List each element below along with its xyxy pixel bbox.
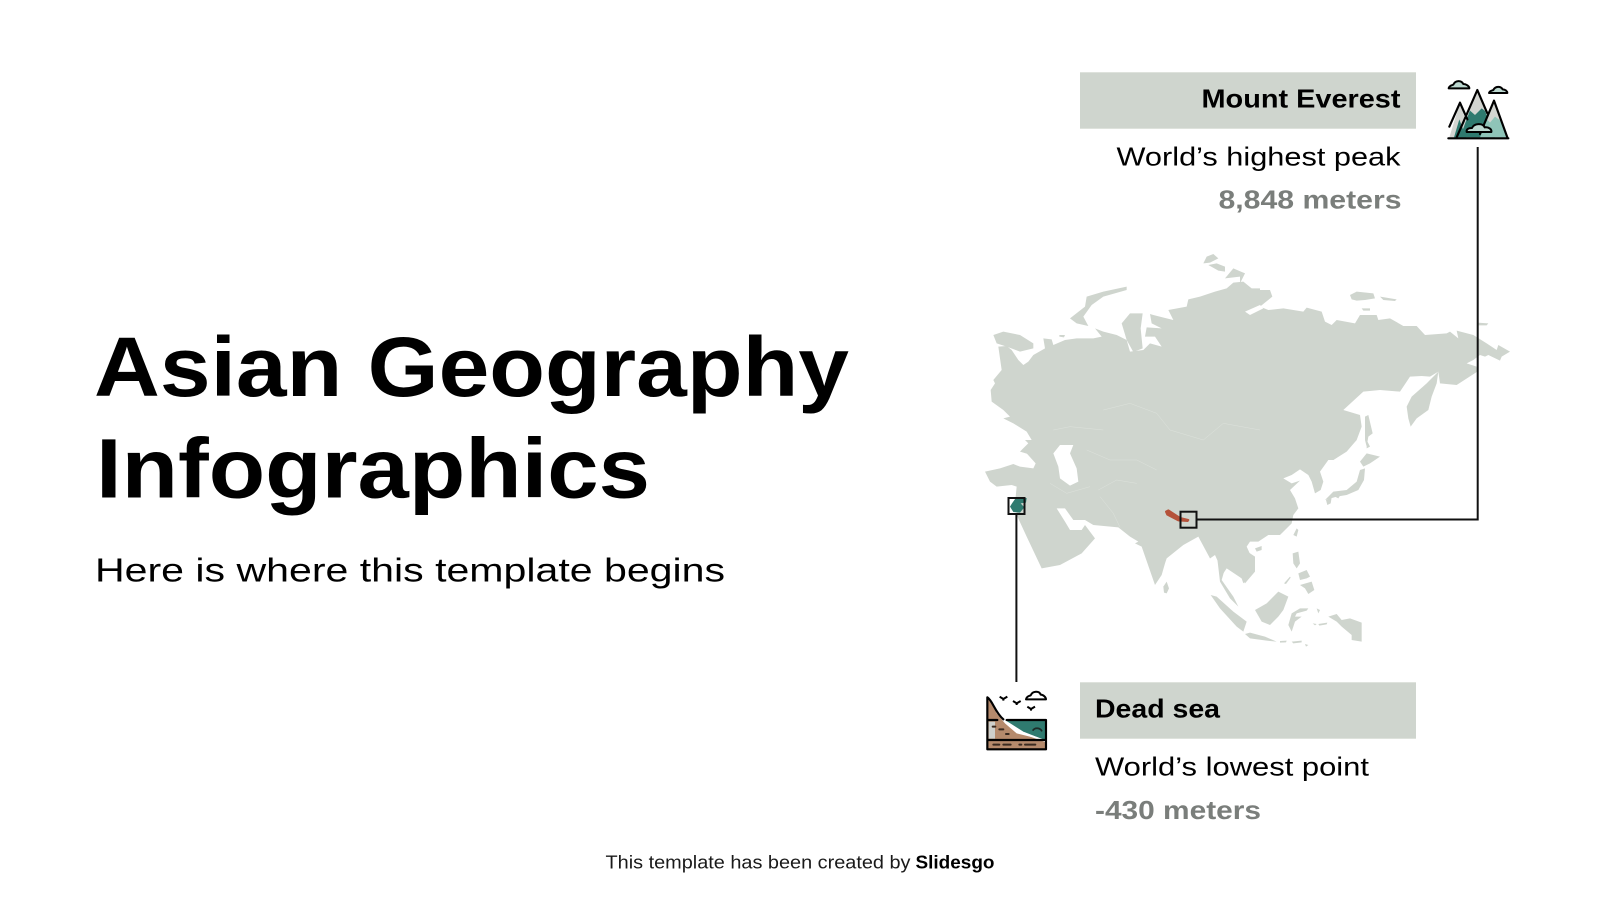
value: -430 meters [1095, 795, 1261, 825]
footer credit: This template has been created by [606, 851, 911, 872]
land: south-west Asia and India [985, 440, 1260, 593]
panel: Dead sea [1080, 682, 1416, 825]
title: Infographics [96, 422, 650, 516]
description: World’s lowest point [1095, 751, 1370, 781]
land: north-east Asia [1240, 272, 1510, 460]
description: World’s highest peak [1116, 141, 1402, 171]
icon: mountains [1448, 81, 1508, 138]
icon: dead sea cliff [987, 692, 1046, 749]
connector: Dead Sea [1008, 498, 1024, 682]
highlight: Nepal [1166, 510, 1188, 521]
footer credit: Slidesgo [916, 851, 994, 872]
land: north-west Asia [991, 254, 1260, 460]
value: 8,848 meters [1218, 184, 1402, 214]
land: south-east Asia [1200, 440, 1380, 647]
highlight: Dead Sea area [1010, 498, 1027, 513]
subtitle: Here is where this template begins [95, 552, 725, 588]
panel: Mount Everest [1080, 72, 1416, 214]
label bar [1080, 72, 1416, 129]
title [94, 320, 849, 516]
title: Asian Geography [94, 320, 849, 414]
map of Asia [985, 254, 1510, 647]
heading: Dead sea [1095, 693, 1221, 723]
inland water and borders [1050, 305, 1263, 527]
heading: Mount Everest [1202, 83, 1401, 113]
label bar [1080, 682, 1416, 739]
connector: Mount Everest [1180, 147, 1478, 528]
